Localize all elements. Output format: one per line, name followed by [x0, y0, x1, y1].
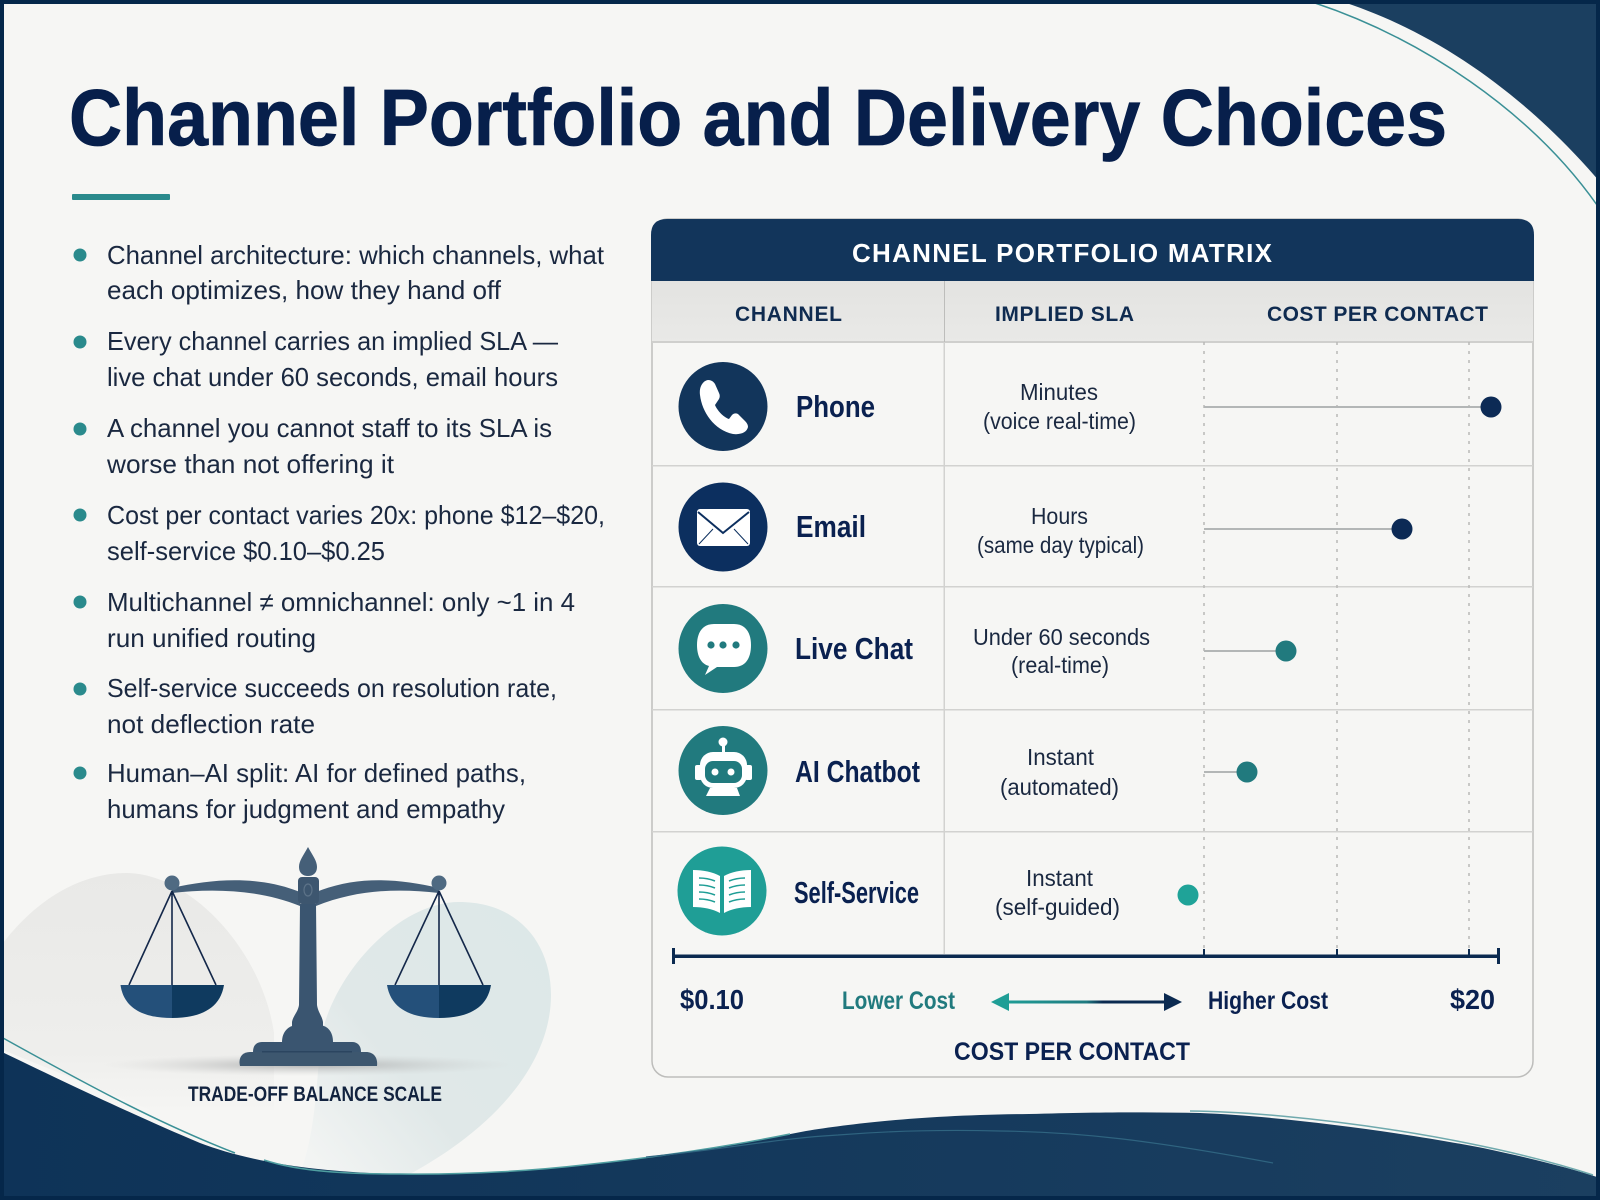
icon: open book: [678, 846, 766, 936]
row: phone: Minutes: [1020, 379, 1098, 405]
row: live chat: (real-time): [1011, 652, 1109, 678]
row: ai chatbot: AI Chatbot: [795, 754, 920, 789]
card outline: [652, 219, 1533, 1077]
bullet 3: A channel you cannot staff to its SLA is: [107, 413, 552, 443]
column headers: [652, 281, 1533, 343]
bullet 3: [74, 413, 552, 479]
matrix header: [651, 219, 1534, 281]
row: self-service: Self-Service: [794, 875, 919, 910]
bullet 4: [74, 500, 605, 566]
icon: robot: [678, 726, 768, 815]
row: ai chatbot: [678, 726, 1258, 815]
bullet 7: Human–AI split: AI for defined paths,: [107, 758, 526, 788]
bullet 5: [74, 587, 575, 653]
panel: channel portfolio matrix: [651, 219, 1534, 1077]
row: email: (same day typical): [977, 532, 1144, 558]
row: self-service: (self-guided): [995, 894, 1120, 920]
title: Channel Portfolio and Delivery Choices: [69, 73, 1447, 162]
bullet 6: not deflection rate: [107, 709, 315, 739]
row: phone: [678, 362, 1502, 451]
cost axis: [672, 948, 1500, 964]
column headers: COST PER CONTACT: [1267, 303, 1488, 326]
icon: email: [678, 482, 768, 572]
axis minimum label: $0.10: [680, 984, 744, 1015]
row: email: [678, 482, 1412, 572]
row: email: Hours: [1031, 503, 1088, 529]
row: live chat: [678, 604, 1296, 693]
row: self-service: Instant: [1026, 865, 1094, 891]
bullet 7: humans for judgment and empathy: [107, 794, 505, 824]
arrow: cost direction: [991, 993, 1182, 1011]
decorative blob: teal: [300, 902, 551, 1174]
scale caption: TRADE-OFF BALANCE SCALE: [188, 1083, 442, 1106]
column headers: IMPLIED SLA: [995, 303, 1134, 326]
bottom wave: [0, 1038, 1600, 1200]
bullet 2: Every channel carries an implied SLA —: [107, 326, 558, 356]
decorative blob: grey: [3, 873, 274, 1110]
bullet 5: Multichannel ≠ omnichannel: only ~1 in 4: [107, 587, 575, 617]
bullet 5: run unified routing: [107, 623, 316, 653]
bullet 1: [74, 240, 605, 305]
bullet 2: live chat under 60 seconds, email hours: [107, 362, 558, 392]
table grid lines: [652, 342, 1533, 954]
matrix header: CHANNEL PORTFOLIO MATRIX: [852, 238, 1273, 268]
icon: phone: [678, 362, 768, 451]
row: self-service: [678, 846, 1198, 936]
axis title: COST PER CONTACT: [954, 1038, 1190, 1066]
row: email: Email: [796, 509, 866, 544]
column headers: CHANNEL: [735, 303, 842, 326]
row: ai chatbot: (automated): [1000, 774, 1119, 800]
lower cost label: Lower Cost: [842, 987, 956, 1015]
row: phone: Phone: [796, 389, 875, 424]
title accent bar: [72, 194, 170, 200]
bullet 6: [74, 673, 557, 739]
bullet 1: Channel architecture: which channels, what: [107, 240, 605, 270]
bullet 4: self-service $0.10–$0.25: [107, 536, 385, 566]
bullet 4: Cost per contact varies 20x: phone $12–$20,: [107, 500, 605, 530]
row: ai chatbot: Instant: [1027, 744, 1095, 770]
row: live chat: Under 60 seconds: [973, 624, 1150, 650]
bullet list: [74, 240, 605, 824]
icon: chat bubble: [678, 604, 768, 693]
row: live chat: Live Chat: [795, 631, 913, 666]
bullet 7: [74, 758, 526, 824]
row: phone: (voice real-time): [983, 408, 1136, 434]
bullet 2: [74, 326, 558, 392]
axis maximum label: $20: [1450, 984, 1495, 1015]
bullet 3: worse than not offering it: [106, 449, 395, 479]
top right corner wave: [1315, 0, 1600, 205]
icon: balance scale: [103, 847, 513, 1076]
bullet 6: Self-service succeeds on resolution rate,: [107, 673, 557, 703]
higher cost label: Higher Cost: [1208, 987, 1329, 1015]
bullet 1: each optimizes, how they hand off: [107, 275, 502, 305]
